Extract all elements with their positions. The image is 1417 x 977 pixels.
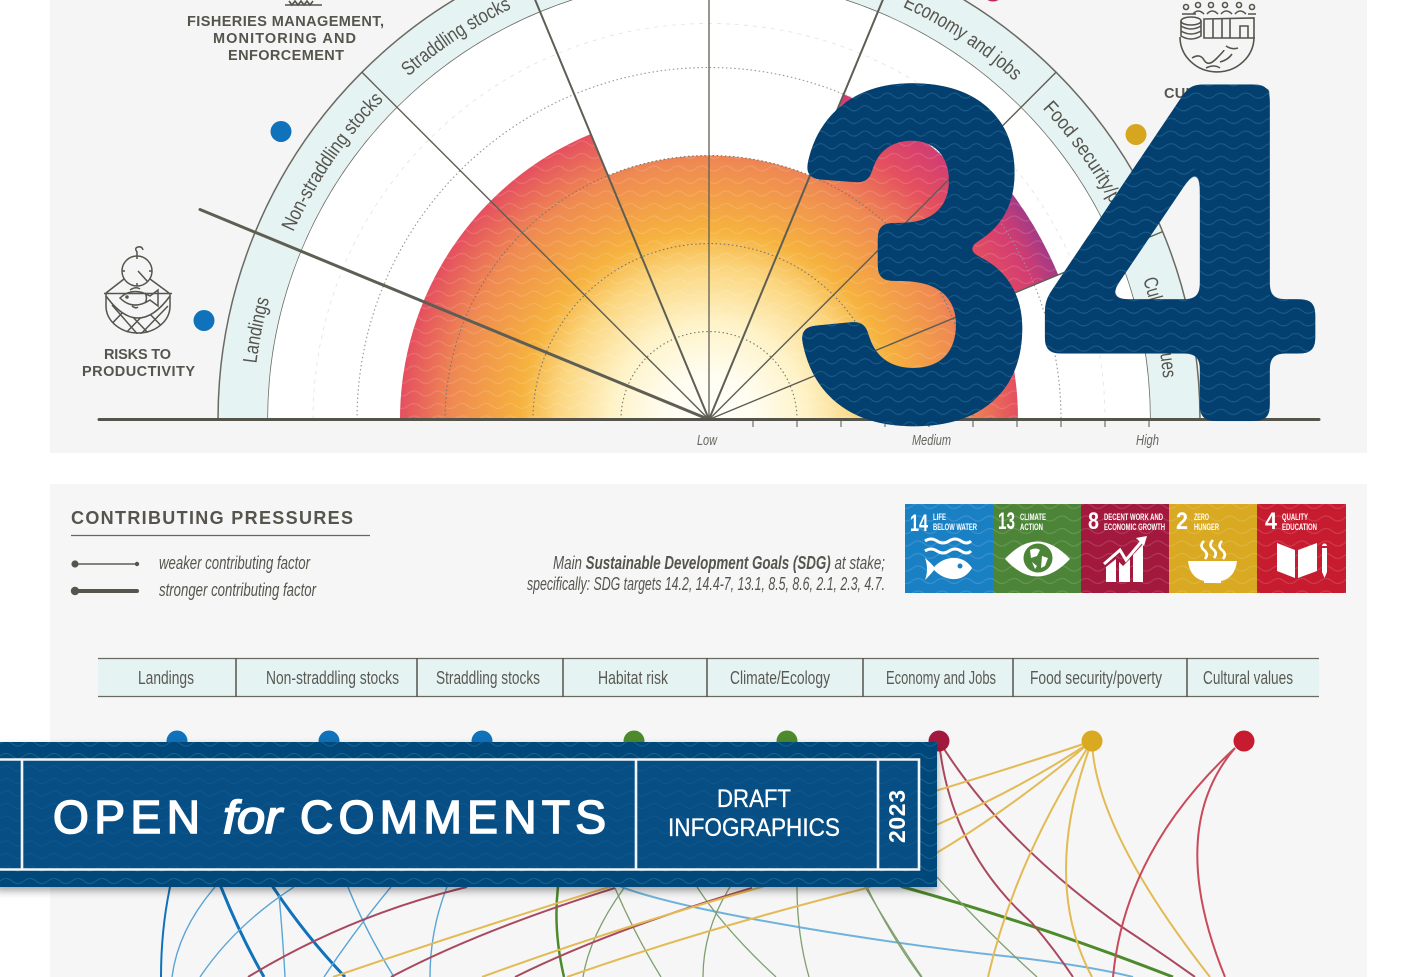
- tile: SDG 13: CLIMATE: [1020, 512, 1046, 523]
- category header row: Cultural values: [1203, 668, 1293, 688]
- red links: [1113, 748, 1235, 977]
- sector dividers: [200, 0, 1163, 420]
- heading: contributing pressures: CONTRIBUTING PRESSURES: [71, 508, 353, 528]
- panel: radial chart background: [50, 0, 1367, 453]
- tile: SDG 8: [1081, 504, 1170, 593]
- icon: fish in net: [104, 246, 172, 334]
- legend: weaker factor: [71, 553, 311, 573]
- label: fisheries management: MONITORING AND: [213, 31, 356, 47]
- category header row: Climate/Ecology: [730, 668, 830, 688]
- banner year: 2023: [884, 790, 910, 843]
- tile: SDG 13: 13: [998, 508, 1015, 535]
- tile: SDG 2: [1169, 504, 1258, 593]
- tile: SDG 8: ECONOMIC GROWTH: [1104, 522, 1165, 533]
- tile: SDG 4: [1257, 504, 1346, 593]
- banner frame: [0, 760, 919, 870]
- panel: contributing pressures background: [50, 484, 1367, 977]
- label: culture and society: CULTURE AND: [1164, 86, 1270, 102]
- band labels: [242, 0, 1174, 378]
- tile: SDG 2: ZERO: [1194, 512, 1209, 523]
- maroon links: [248, 741, 1195, 977]
- SDG caption: Main Sustainable Development Goals (SDG) at stake;: [553, 553, 885, 573]
- tile: SDG 14: 14: [910, 510, 928, 537]
- category header row: Food security/poverty: [1030, 668, 1162, 688]
- tile: SDG 14: LIFE: [933, 512, 946, 523]
- legend: weaker factor: weaker contributing factor: [159, 553, 311, 573]
- label: risks to productivity: PRODUCTIVITY: [82, 364, 195, 380]
- tile: SDG 2: HUNGER: [1194, 522, 1219, 533]
- tile: SDG 2: 2: [1176, 508, 1188, 535]
- label: risks to productivity: RISKS TO: [104, 347, 171, 363]
- category dots: [194, 0, 1146, 331]
- label: culture and society: SOCIETY: [1186, 104, 1250, 120]
- label: fisheries management: [187, 14, 384, 64]
- SDG tiles: [905, 504, 1346, 593]
- heading underline: [71, 534, 370, 536]
- network curves: [161, 741, 1235, 977]
- tile: SDG 13: [993, 504, 1082, 593]
- category header row: [98, 658, 1319, 697]
- legend: stronger factor: [71, 580, 317, 600]
- risk heat sectors: [400, 94, 1058, 420]
- label: culture and society: [1164, 86, 1270, 120]
- tile: SDG 14: [905, 504, 994, 593]
- chart: semicircular risk chart: [98, 0, 1320, 449]
- tile: SDG 14: BELOW WATER: [933, 522, 977, 533]
- banner title: COMMENTS: [300, 791, 606, 843]
- axis ticks: [753, 420, 1149, 427]
- dotted level rings: [313, 24, 1105, 420]
- category header row: Straddling stocks: [436, 668, 540, 688]
- tile: SDG 8: DECENT WORK AND: [1104, 512, 1163, 523]
- axis labels: Medium: [912, 433, 951, 449]
- category header row: Landings: [138, 668, 194, 688]
- label: risks to productivity: [82, 347, 195, 380]
- band labels: Non-straddling stocks: [281, 94, 382, 231]
- yellow links: [333, 741, 1210, 977]
- category header row: Non-straddling stocks: [266, 668, 399, 688]
- white inner disc: [268, 0, 1150, 419]
- green links: [556, 741, 634, 977]
- label: fisheries management: FISHERIES MANAGEMENT,: [187, 14, 384, 30]
- axis labels: Low: [697, 433, 718, 449]
- banner subtitle: [668, 785, 840, 842]
- outer label band: [218, 0, 1200, 420]
- banner subtitle: INFOGRAPHICS: [668, 814, 840, 842]
- category header row: Economy and Jobs: [886, 668, 996, 688]
- banner subtitle: DRAFT: [717, 785, 791, 813]
- tile: SDG 4: QUALITY: [1282, 512, 1308, 523]
- tile: SDG 4: 4: [1265, 508, 1278, 535]
- banner title: OPEN: [53, 791, 200, 843]
- big number 34: [793, 0, 1318, 521]
- axis labels: High: [1136, 433, 1159, 449]
- legend: stronger factor: stronger contributing factor: [159, 580, 317, 600]
- node dots: [166, 730, 1254, 752]
- banner title: for: [223, 791, 284, 843]
- horizontal axis: [99, 418, 1319, 421]
- icon: fisheries base: [285, 1, 322, 5]
- tile: SDG 4: EDUCATION: [1282, 522, 1317, 533]
- label: fisheries management: ENFORCEMENT: [228, 48, 344, 64]
- axis labels: [697, 433, 1159, 449]
- band labels: Food security/poverty: [1043, 100, 1119, 202]
- banner title: [53, 791, 606, 843]
- icon: culture globe: [1180, 2, 1256, 72]
- SDG caption: [527, 553, 885, 594]
- blue links: [161, 741, 345, 977]
- band labels: Landings: [242, 298, 270, 362]
- category header row: Habitat risk: [598, 668, 669, 688]
- digit 3: 3: [793, 0, 1036, 520]
- banner: open for comments: [0, 742, 937, 887]
- tile: SDG 13: ACTION: [1020, 522, 1043, 533]
- tile: SDG 8: 8: [1088, 508, 1099, 535]
- SDG caption: specifically: SDG targets 14.2, 14.4-7, 13.1, 8.5, 8.6, 2.1, 2.3, 4.7.: [527, 574, 885, 594]
- band labels: Cultural values: [1144, 278, 1174, 378]
